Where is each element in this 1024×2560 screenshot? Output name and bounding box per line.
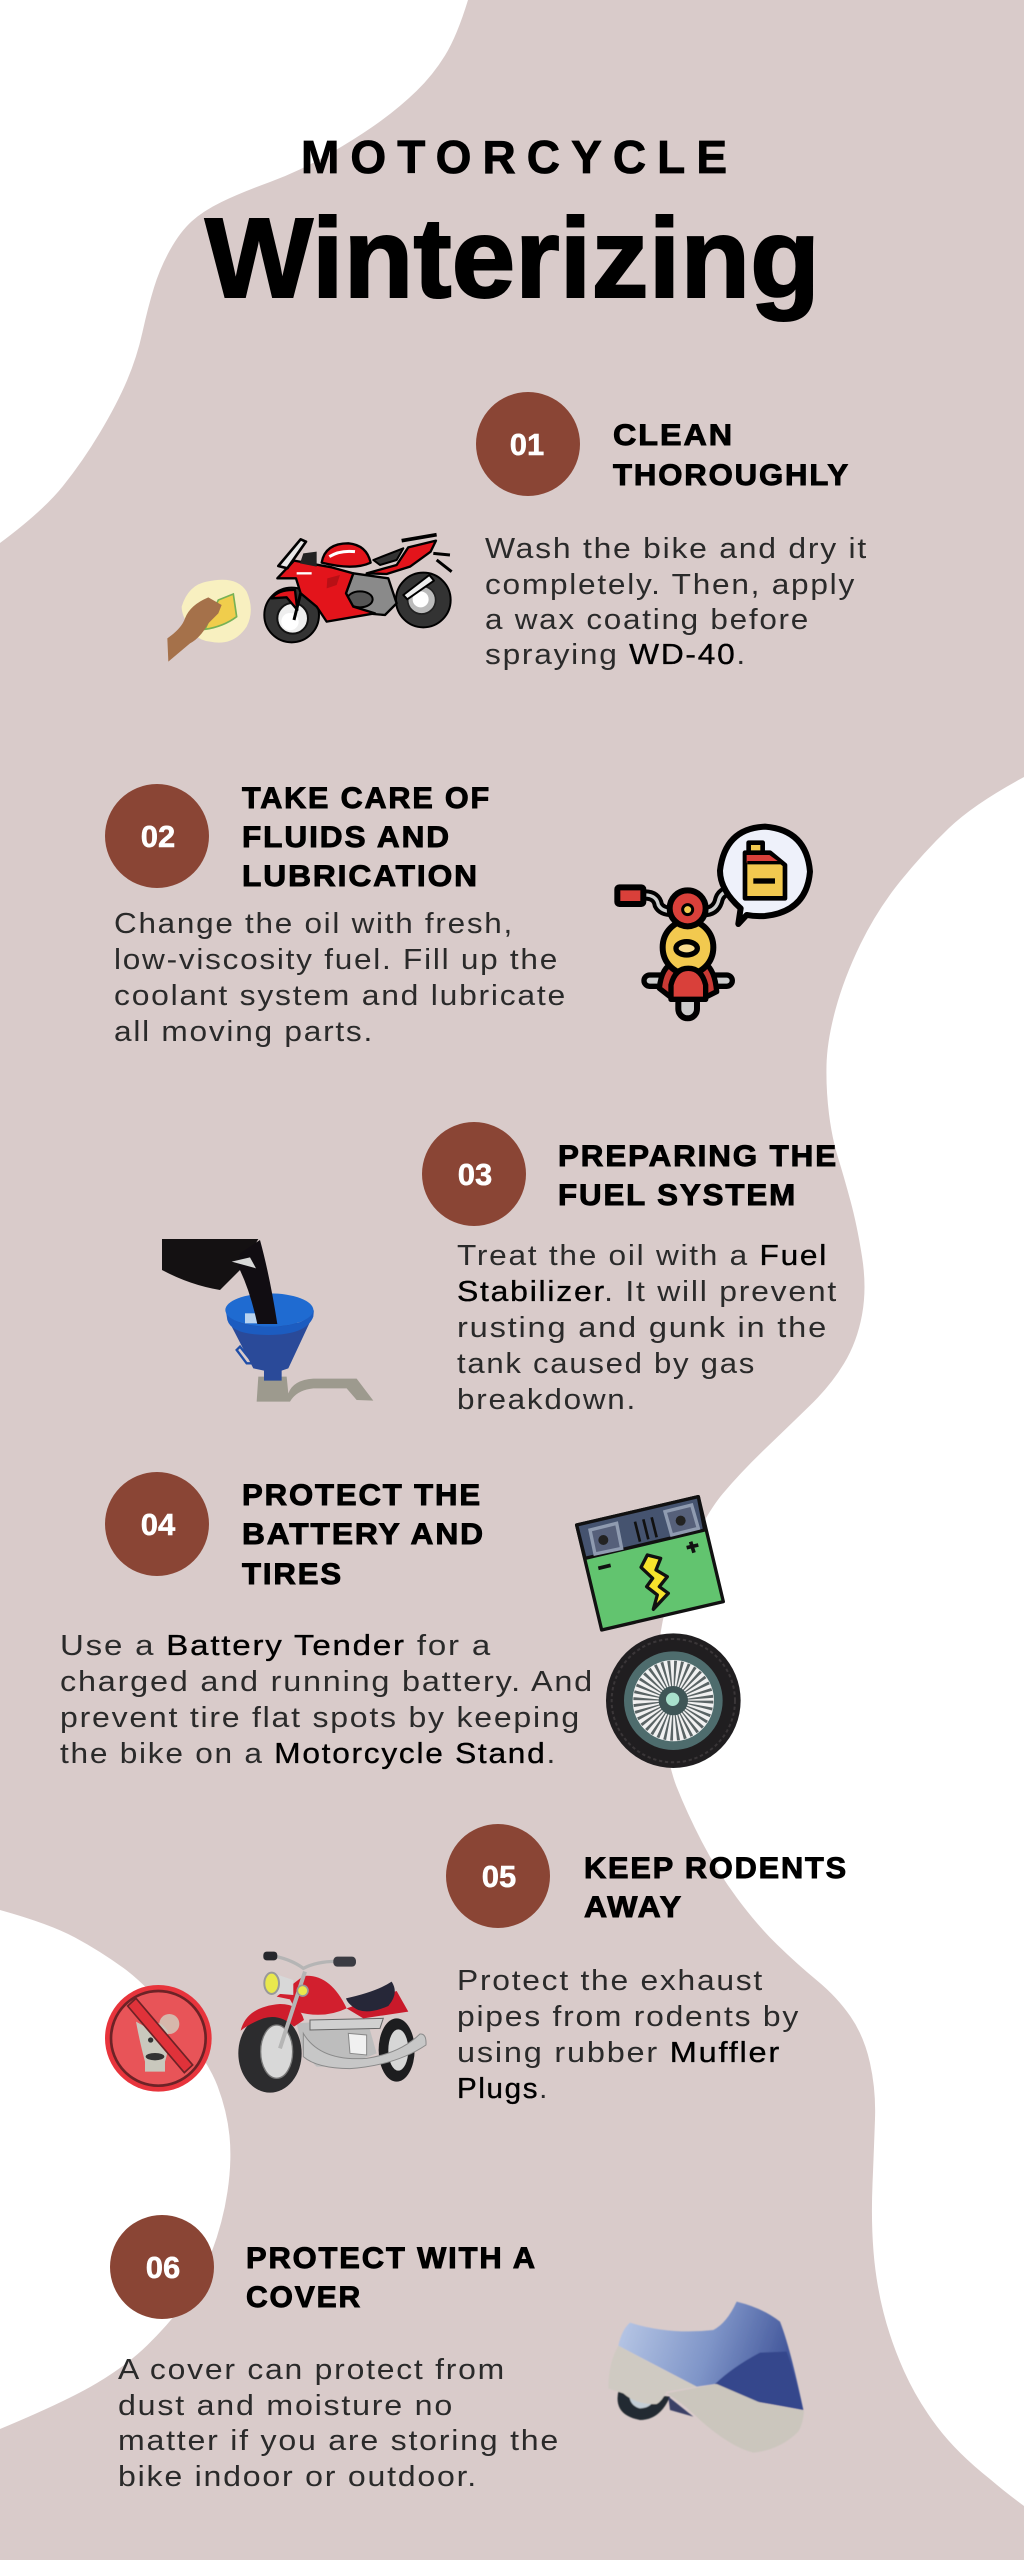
heading 03: PREPARING THE — [558, 1140, 838, 1173]
heading 03: FUEL SYSTEM — [558, 1179, 797, 1212]
panel: step 04 — [60, 1472, 741, 1770]
title line: Winterizing: Winterizing — [205, 195, 820, 321]
heading 04: TIRES — [242, 1558, 343, 1591]
icon: battery — [577, 1497, 723, 1630]
body text 04: the bike on a Motorcycle Stand . — [60, 1738, 557, 1770]
body text 02: Change the oil with fresh, — [114, 908, 514, 940]
number badge 04: 04 — [141, 1507, 176, 1542]
number badge 02: 02 — [141, 819, 175, 854]
body text 03 — [457, 1240, 838, 1416]
body text 05 — [457, 1965, 800, 2105]
number badge 06: 06 — [146, 2250, 180, 2285]
white blob: bottom left — [0, 1910, 230, 2429]
body text 05: pipes from rodents by — [457, 2001, 800, 2033]
icon: oil poured into funnel — [162, 1239, 373, 1402]
number badge 01 — [476, 392, 580, 496]
panel: step 03 — [162, 1122, 838, 1416]
body text 05: Protect the exhaust — [457, 1965, 764, 1997]
body text 05: Plugs. — [457, 2073, 549, 2105]
number badge 05 — [446, 1824, 550, 1928]
heading 04 — [242, 1479, 485, 1591]
number badge 05: 05 — [482, 1859, 516, 1894]
heading 02: TAKE CARE OF — [242, 782, 491, 815]
title line: Motorcycle: MOTORCYCLE — [301, 131, 727, 183]
title — [205, 131, 820, 321]
body text 02: low-viscosity fuel. Fill up the — [114, 944, 559, 976]
body text 02 — [114, 908, 567, 1048]
heading 05 — [584, 1852, 848, 1924]
body text 02: all moving parts. — [114, 1016, 374, 1048]
white blob: top left — [0, 0, 468, 543]
panel: step 06 — [110, 2215, 804, 2493]
body text 06: bike indoor or outdoor. — [118, 2461, 478, 2493]
body text 04: charged and running battery. And — [60, 1666, 594, 1698]
body text 02: coolant system and lubricate — [114, 980, 567, 1012]
heading 01: CLEAN — [613, 419, 734, 452]
body text 01 — [485, 533, 868, 671]
heading 02 — [242, 782, 491, 893]
icon: red sport motorcycle — [264, 535, 452, 642]
heading 02: LUBRICATION — [242, 860, 479, 893]
body text 05: using rubber Muffler — [457, 2037, 781, 2069]
heading 05: AWAY — [584, 1891, 683, 1924]
heading 01 — [613, 419, 850, 492]
icon: motorcycle with oil bubble — [617, 827, 810, 1018]
body text 01: spraying WD-40 . — [485, 639, 747, 671]
body text 04 — [60, 1630, 594, 1770]
body text 06: A cover can protect from — [118, 2354, 506, 2386]
number badge 03: 03 — [458, 1157, 492, 1192]
body text 01: Wash the bike and dry it — [485, 533, 868, 565]
icon: tire — [606, 1633, 741, 1768]
body text 04: Use a Battery Tender for a — [60, 1630, 492, 1662]
heading 02: FLUIDS AND — [242, 821, 451, 854]
heading 06 — [246, 2242, 537, 2314]
icon: hand washing with sponge — [167, 580, 251, 662]
white blob: right — [658, 777, 1024, 2506]
body text 04: prevent tire flat spots by keeping — [60, 1702, 581, 1734]
number badge 03 — [422, 1122, 526, 1226]
body text 03: rusting and gunk in the — [457, 1312, 828, 1344]
number badge 01: 01 — [510, 427, 544, 462]
number badge 02 — [105, 784, 209, 888]
icon: covered motorcycle — [608, 2302, 804, 2453]
body text 06 — [118, 2354, 560, 2493]
heading 01: THOROUGHLY — [613, 459, 850, 492]
body text 03: tank caused by gas — [457, 1348, 756, 1380]
icon: no rodents sign — [105, 1985, 212, 2092]
panel: step 05 — [105, 1824, 848, 2105]
heading 05: KEEP RODENTS — [584, 1852, 848, 1885]
icon: red cruiser motorcycle — [238, 1952, 426, 2093]
body text 01: a wax coating before — [485, 604, 810, 636]
body text 06: dust and moisture no — [118, 2390, 454, 2422]
heading 04: PROTECT THE — [242, 1479, 482, 1512]
heading 06: PROTECT WITH A — [246, 2242, 537, 2275]
number badge 04 — [105, 1472, 209, 1576]
panel: step 02 — [105, 782, 810, 1048]
body text 01: completely. Then, apply — [485, 569, 856, 601]
number badge 06 — [110, 2215, 214, 2319]
heading 06: COVER — [246, 2281, 362, 2314]
panel: step 01 — [167, 392, 868, 671]
body text 03: Treat the oil with a Fuel — [457, 1240, 828, 1272]
body text 03: Stabilizer . It will prevent — [457, 1276, 838, 1308]
body text 06: matter if you are storing the — [118, 2425, 560, 2457]
heading 03 — [558, 1140, 838, 1212]
heading 04: BATTERY AND — [242, 1518, 485, 1551]
body text 03: breakdown. — [457, 1384, 637, 1416]
